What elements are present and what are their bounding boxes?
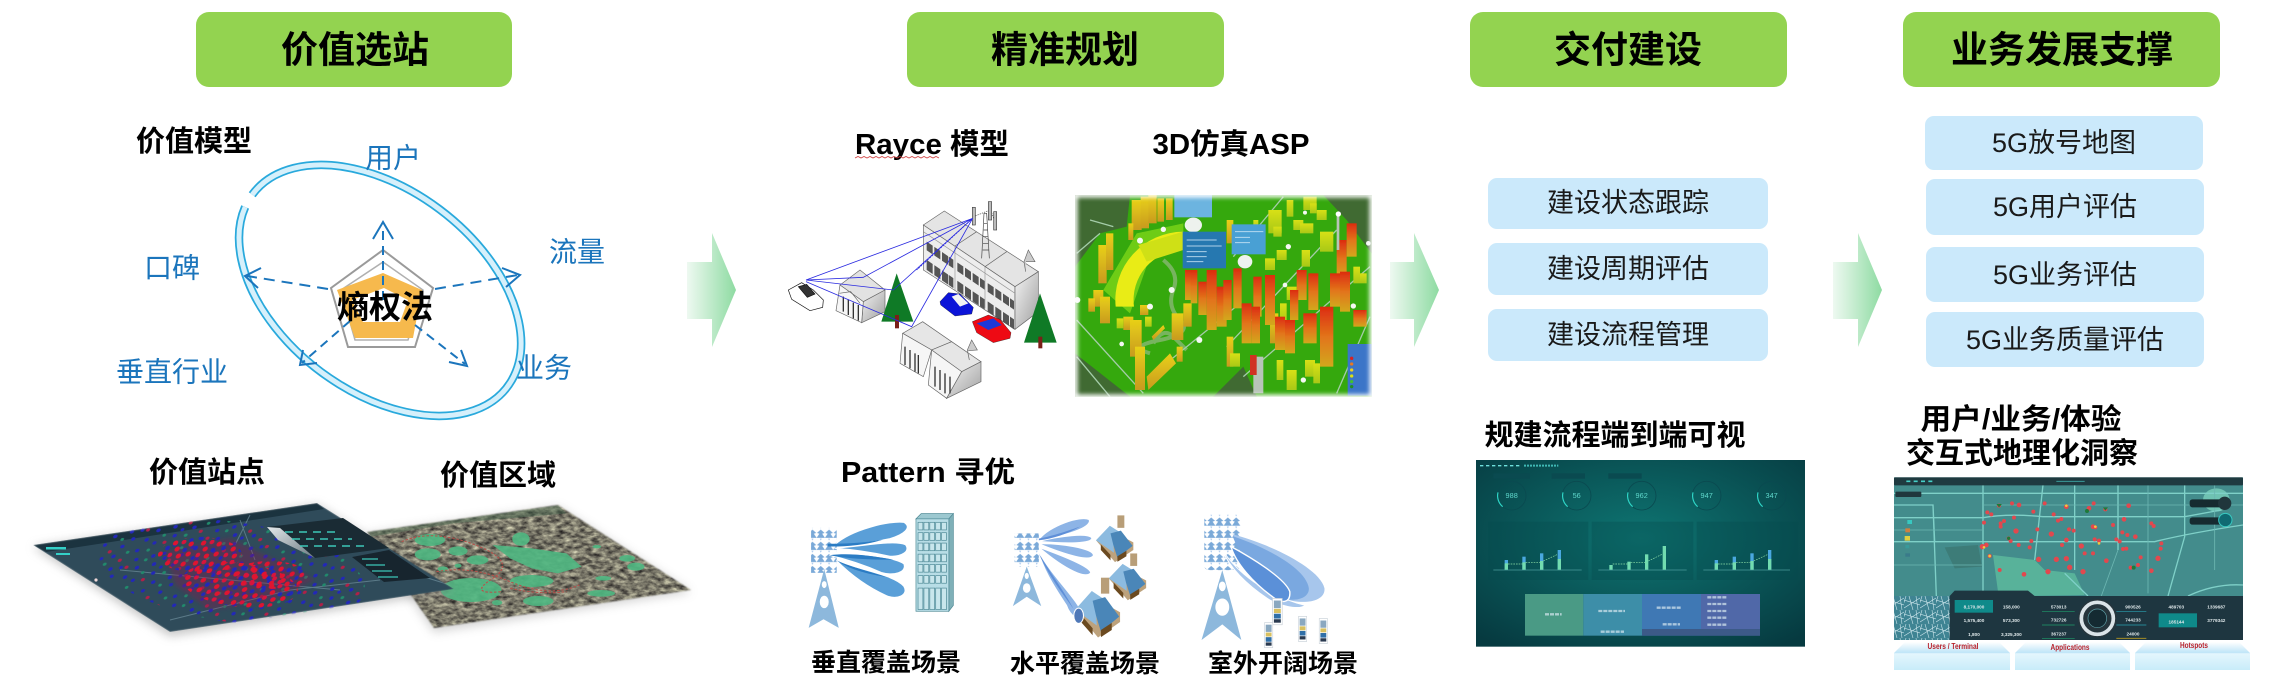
item: 5G业务评估: 5G业务评估 [1993, 260, 2137, 290]
panel: KPI strip: 489703 [2169, 604, 2185, 609]
gauge values: 962 [1636, 491, 1648, 500]
bar charts [1488, 522, 1798, 580]
header: 交付建设 [1470, 12, 1787, 87]
heading: 交互式地理化洞察: 交互式地理化洞察 [1906, 437, 2138, 470]
label: 业务: 业务 [516, 352, 572, 384]
trees [881, 273, 1057, 348]
dashboard: end to end process [1476, 460, 1805, 647]
item: 5G业务质量评估: 5G业务质量评估 [1966, 325, 2164, 355]
dashboard: interactive geo map [1894, 477, 2243, 640]
item: 建设状态跟踪: 建设状态跟踪 [1547, 188, 1709, 218]
panel: KPI strip: 900526 [2125, 604, 2141, 609]
panel: KPI strip: 732726 [2051, 617, 2067, 622]
gauge values: 988 [1506, 491, 1518, 500]
heading: 规建流程端到端可视: 规建流程端到端可视 [1484, 419, 1746, 452]
gauge values [1506, 491, 1778, 500]
panel: KPI strip: 3779342 [2207, 618, 2226, 623]
gauges [1497, 481, 1786, 510]
dashed arrows [245, 222, 520, 366]
small house [836, 270, 885, 323]
icon: vertical coverage scene [809, 514, 953, 628]
heading: 用户/业务/体验: 用户/业务/体验 [1920, 403, 2122, 436]
header: 精准规划 [907, 12, 1224, 87]
label: 熵权法: 熵权法 [337, 289, 433, 325]
heading: 3D仿真ASP: 3D仿真ASP [1152, 128, 1310, 161]
label: 水平覆盖场景: 水平覆盖场景 [1010, 650, 1160, 678]
gauge values: 347 [1766, 491, 1778, 500]
image: 3D simulation ASP [1074, 194, 1372, 397]
panel: floating data table upper [267, 518, 389, 558]
header: 价值选站 [196, 12, 512, 87]
tab: Users / Terminal [1894, 641, 2010, 670]
tab: Users / Terminal: Users / Terminal [1928, 641, 1978, 651]
label: 流量: 流量 [549, 236, 605, 268]
item: 建设流程管理 [1488, 309, 1768, 361]
item: 5G业务评估 [1926, 247, 2204, 302]
header: 价值选站: 价值选站 [281, 30, 429, 70]
list: construction items [1488, 178, 1768, 361]
item: 建设周期评估 [1488, 243, 1768, 295]
header: 精准规划: 精准规划 [991, 30, 1139, 70]
header: 业务发展支撑 [1903, 12, 2220, 87]
panel: floating data table lower [352, 550, 430, 582]
label: 口碑: 口碑 [144, 252, 200, 284]
cars [788, 283, 1011, 343]
item: 5G用户评估: 5G用户评估 [1993, 192, 2137, 222]
panel: KPI strip: 158,000 [2003, 604, 2020, 609]
antenna tower [972, 202, 997, 258]
signal rays [806, 218, 973, 327]
panel: KPI strip: 744233 [2125, 617, 2141, 622]
heading: Rayce 模型: Rayce 模型 [855, 128, 1009, 161]
label: 垂直行业: 垂直行业 [116, 356, 228, 388]
header: 业务发展支撑: 业务发展支撑 [1951, 30, 2173, 70]
illustration: ray tracing scene [788, 202, 1057, 398]
map: value sites dark dashboard [33, 503, 454, 640]
main building [923, 211, 1038, 329]
panel: KPI strip: 24000 [2127, 631, 2140, 636]
panel: KPI strip [1894, 591, 2243, 640]
label: 室外开阔场景: 室外开阔场景 [1208, 649, 1358, 678]
panel: KPI strip: 573,300 [2003, 618, 2020, 623]
item: 建设流程管理: 建设流程管理 [1547, 320, 1709, 350]
icon: outdoor open scene [1202, 515, 1327, 648]
item: 5G业务质量评估 [1926, 312, 2204, 367]
item: 5G放号地图: 5G放号地图 [1992, 128, 2136, 158]
item: 5G用户评估 [1926, 179, 2204, 235]
heading: 价值模型: 价值模型 [136, 125, 252, 158]
label: 垂直覆盖场景: 垂直覆盖场景 [811, 649, 961, 677]
label: 用户: 用户 [365, 142, 421, 174]
arrow 2 [1390, 233, 1439, 347]
panel: KPI strip: 185144 [2169, 619, 2185, 624]
heading: Pattern 寻优: Pattern 寻优 [841, 456, 1015, 489]
list: business support items [1925, 116, 2204, 367]
tab: Hotspots: Hotspots [2180, 640, 2208, 650]
panel: KPI strip: 3,325,300 [2001, 632, 2022, 637]
item: 建设周期评估: 建设周期评估 [1547, 254, 1709, 284]
pattern icons row [809, 514, 1327, 648]
panel: KPI strip: 1,800 [1968, 632, 1980, 637]
arrow 1 [687, 233, 736, 347]
icon: tilted ring [192, 114, 568, 467]
panel: KPI strip: 8,170,000 [1964, 604, 1985, 609]
tab: Hotspots [2135, 640, 2250, 670]
panel: KPI strip: 573013 [2051, 604, 2067, 609]
heading: 价值区域: 价值区域 [440, 459, 556, 492]
panel: KPI strip: 367237 [2051, 631, 2067, 636]
lower building [900, 322, 981, 398]
gauge values: 56 [1573, 491, 1581, 500]
panel: KPI strip: 1339687 [2207, 604, 2226, 609]
panel: KPI strip: 1,575,400 [1964, 618, 1985, 623]
header: 交付建设: 交付建设 [1554, 30, 1702, 70]
gauge values: 947 [1701, 491, 1713, 500]
item: 建设状态跟踪 [1488, 178, 1768, 229]
map: value area satellite [360, 500, 695, 632]
arrow 3 [1833, 233, 1882, 347]
value model radar diagram [116, 114, 605, 467]
treemap [1525, 594, 1760, 636]
tab: Applications [2015, 642, 2130, 670]
icon: horizontal coverage scene [1013, 515, 1146, 638]
heading: 价值站点: 价值站点 [149, 456, 265, 489]
icon: entropy radar pentagon [331, 250, 433, 347]
tab: Applications: Applications [2050, 642, 2090, 652]
item: 5G放号地图 [1925, 116, 2203, 170]
